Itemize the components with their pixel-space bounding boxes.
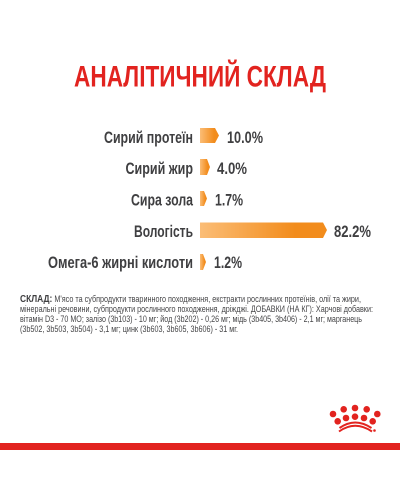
value: raw fat: 4.0% xyxy=(217,160,247,178)
row: moisture xyxy=(134,222,371,241)
bar: moisture xyxy=(200,222,327,238)
label: moisture: Вологість xyxy=(134,223,193,241)
label: raw fat: Сирий жир xyxy=(126,160,193,178)
icon: Royal Canin crown logo xyxy=(330,405,381,432)
title: АНАЛІТИЧНИЙ СКЛАД xyxy=(74,60,326,94)
row: raw protein xyxy=(104,128,263,147)
row: omega-6 xyxy=(48,254,242,272)
value: raw protein: 10.0% xyxy=(227,129,263,147)
label: raw protein: Сирий протеїн xyxy=(104,129,193,147)
bar: omega-6 xyxy=(200,254,206,270)
row: crude ash xyxy=(131,191,243,210)
row: raw fat xyxy=(126,159,247,178)
label: crude ash: Сира зола xyxy=(131,192,194,210)
bar: raw fat xyxy=(200,159,210,175)
composition text block xyxy=(20,293,373,334)
value: omega-6: 1.2% xyxy=(214,254,242,272)
label: omega-6: Омега-6 жирні кислоти xyxy=(48,254,193,272)
bar: crude ash xyxy=(200,191,207,206)
bar: raw protein xyxy=(200,128,219,143)
value: moisture: 82.2% xyxy=(334,223,371,241)
value: crude ash: 1.7% xyxy=(215,192,243,210)
footer red band xyxy=(0,443,400,450)
composition text block: (3b502, 3b503, 3b504) - 3,1 мг; цинк (3b603, 3b605, 3b606) - 31 мг. xyxy=(20,324,238,334)
